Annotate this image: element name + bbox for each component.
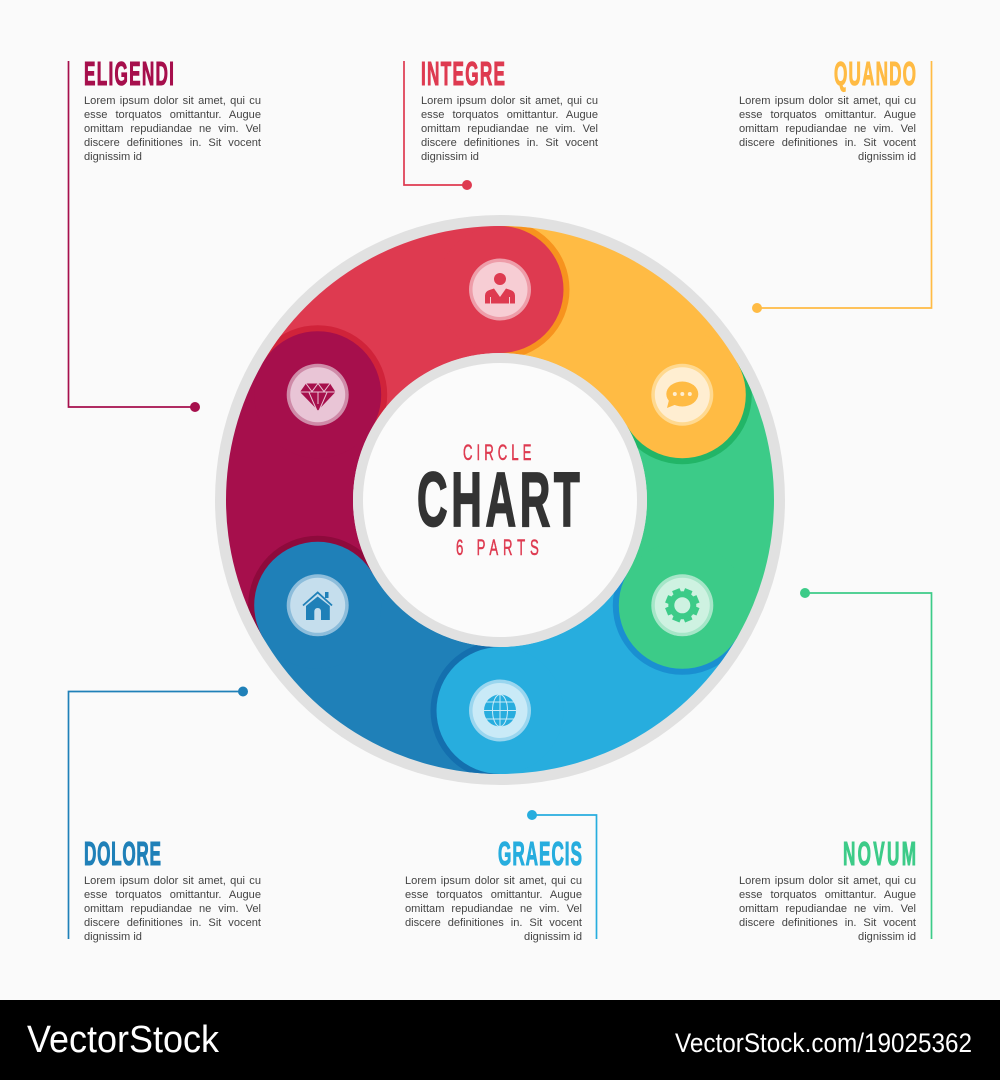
- panel: eligendi: [84, 55, 261, 163]
- text: eligendi body: omittam repudiandae ne vim. Vel: [84, 123, 261, 135]
- icon: person: [469, 258, 531, 320]
- segment: novum body: [627, 363, 774, 637]
- center disc: [363, 363, 637, 637]
- text: quando body: Lorem ipsum dolor sit amet, qui cu: [739, 95, 916, 107]
- text: graecis body: discere definitiones in. Sit vocent: [405, 917, 582, 929]
- text: eligendi body: Lorem ipsum dolor sit amet, qui cu: [84, 95, 261, 107]
- text: graecis body: dignissim id: [524, 931, 582, 943]
- segment: graecis body: [500, 574, 737, 774]
- cap: integre: [436, 226, 564, 353]
- text: novum body: esse torquatos omittantur. Augue: [739, 889, 916, 901]
- text: integre body: [421, 95, 598, 163]
- cap shadow: dolore over eligendi: [248, 536, 372, 636]
- heading: quando: QUANDO: [834, 55, 916, 93]
- icon: globe: [469, 680, 531, 742]
- panel: quando: [739, 55, 916, 163]
- text: integre body: Lorem ipsum dolor sit amet, qui cu: [421, 95, 598, 107]
- heading: integre: INTEGRE: [421, 55, 505, 93]
- footer bar: [0, 1000, 1000, 1080]
- text: dolore body: discere definitiones in. Sit vocent: [84, 917, 261, 929]
- cap: quando: [619, 331, 746, 458]
- connector line: dolore: [68, 686, 248, 939]
- heading: dolore: DOLORE: [84, 835, 161, 873]
- outer grey ring: [215, 215, 785, 785]
- cap: graecis: [436, 647, 564, 774]
- text: quando body: discere definitiones in. Sit vocent: [739, 137, 916, 149]
- heading: eligendi: ELIGENDI: [84, 55, 174, 93]
- text: dolore body: esse torquatos omittantur. Augue: [84, 889, 261, 901]
- panel: graecis: [405, 835, 582, 943]
- text: integre body: esse torquatos omittantur. Augue: [421, 109, 598, 121]
- cap shadow: novum over graecis: [612, 574, 738, 675]
- text: integre body: dignissim id: [421, 151, 479, 163]
- icon: diamond: [287, 364, 349, 426]
- cap: eligendi: [254, 331, 381, 458]
- text: novum body: Lorem ipsum dolor sit amet, qui cu: [739, 875, 916, 887]
- text: graecis body: omittam repudiandae ne vim. Vel: [405, 903, 582, 915]
- text: novum body: discere definitiones in. Sit vocent: [739, 917, 916, 929]
- cap shadow: integre over quando: [504, 226, 570, 355]
- connector line: integre: [404, 61, 472, 190]
- panel: novum: [739, 835, 916, 943]
- cap shadow: eligendi over integre: [262, 325, 388, 426]
- text: eligendi body: discere definitiones in. Sit vocent: [84, 137, 261, 149]
- connector line: eligendi: [68, 61, 200, 412]
- text: eligendi body: dignissim id: [84, 151, 142, 163]
- title: circle: CIRCLE: [463, 441, 531, 465]
- text: quando body: omittam repudiandae ne vim. Vel: [739, 123, 916, 135]
- footer image id: VectorStock.com/19025362: [675, 1028, 972, 1058]
- icon: chat bubble: [651, 364, 713, 426]
- icon: gear: [651, 574, 713, 636]
- text: graecis body: Lorem ipsum dolor sit amet, qui cu: [405, 875, 582, 887]
- text: dolore body: dignissim id: [84, 931, 142, 943]
- text: novum body: omittam repudiandae ne vim. Vel: [739, 903, 916, 915]
- segment: quando body: [500, 226, 737, 426]
- text: eligendi body: [84, 95, 261, 163]
- text: quando body: esse torquatos omittantur. Augue: [739, 109, 916, 121]
- text: dolore body: Lorem ipsum dolor sit amet, qui cu: [84, 875, 261, 887]
- segment: integre body: [263, 226, 500, 426]
- text: integre body: omittam repudiandae ne vim. Vel: [421, 123, 598, 135]
- center title: [417, 441, 580, 560]
- text: novum body: [739, 875, 916, 943]
- cap shadow: graecis over dolore: [430, 645, 497, 774]
- text: eligendi body: esse torquatos omittantur. Augue: [84, 109, 261, 121]
- text: graecis body: esse torquatos omittantur. Augue: [405, 889, 582, 901]
- text: dolore body: omittam repudiandae ne vim. Vel: [84, 903, 261, 915]
- cap shadow: quando over novum: [628, 363, 752, 464]
- text: graecis body: [405, 875, 582, 943]
- panel: dolore: [84, 835, 261, 943]
- cap: dolore: [254, 542, 381, 669]
- inner grey ring: [353, 353, 647, 647]
- footer brand: VectorStock: [27, 1019, 220, 1061]
- title: 6 parts: 6 PARTS: [456, 536, 539, 560]
- heading: graecis: GRAECIS: [498, 835, 582, 873]
- text: integre body: discere definitiones in. Sit vocent: [421, 137, 598, 149]
- cap: novum: [619, 542, 746, 669]
- connector line: quando: [752, 61, 932, 313]
- connector line: graecis: [527, 810, 596, 939]
- text: quando body: [739, 95, 916, 163]
- text: quando body: dignissim id: [858, 151, 916, 163]
- icon: house: [287, 574, 349, 636]
- heading: novum: NOVUM: [843, 835, 916, 873]
- title: chart: CHART: [417, 458, 580, 543]
- text: dolore body: [84, 875, 261, 943]
- segment: eligendi body: [226, 363, 373, 637]
- connector line: novum: [800, 588, 932, 939]
- text: novum body: dignissim id: [858, 931, 916, 943]
- panel: integre: [421, 55, 598, 163]
- segment: dolore body: [263, 574, 500, 774]
- circle chart: [215, 215, 785, 785]
